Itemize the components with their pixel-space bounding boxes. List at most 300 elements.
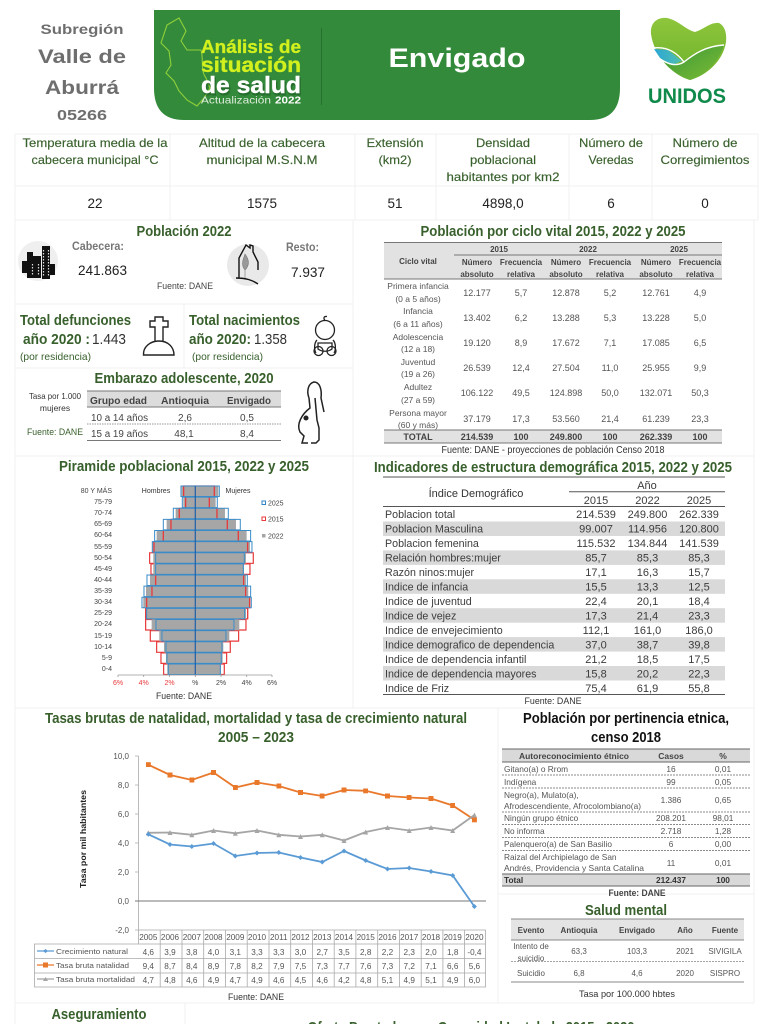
table: étnico: Negro(a), Mulato(a), xyxy=(504,790,579,800)
table: chart data: 2007 xyxy=(183,933,201,942)
table: chart data: 2010 xyxy=(248,933,267,942)
chart: line chart of rates: 0,0 xyxy=(118,897,130,906)
panel: subregion: 05266 xyxy=(57,107,107,124)
chart: line chart of rates: -2,0 xyxy=(115,926,130,935)
panel: embarazo adolescente: Fuente: DANE xyxy=(27,427,83,437)
table: salud mental: 63,3 xyxy=(571,947,587,956)
heading: aseguramiento: Aseguramiento xyxy=(52,1006,146,1023)
table: embarazo: 15 a 19 años xyxy=(91,429,148,440)
chart: line chart of rates: 6,0 xyxy=(118,810,130,819)
title: análisis de situación de salud: de salud xyxy=(202,74,302,100)
table: índice demográfico: 22,4 xyxy=(585,596,607,608)
chart: population pyramid: 45-49 xyxy=(94,566,112,573)
table: ciclo vital: 49,5 xyxy=(512,388,530,398)
table: salud mental xyxy=(511,919,744,982)
table: general data: 0 xyxy=(701,196,709,211)
table: embarazo: 8,4 xyxy=(240,429,254,440)
table: ciclo vital: Ciclo vital xyxy=(399,257,437,266)
table: ciclo vital: (12 a 18) xyxy=(401,344,435,354)
table: general data: cabecera municipal °C xyxy=(32,153,159,167)
chart: line chart of rates: Tasa por mil habitantes xyxy=(78,790,88,888)
icon: baby xyxy=(314,316,336,356)
table: ciclo vital: 100 xyxy=(692,432,708,442)
table: chart data: 3,3 xyxy=(251,948,263,957)
table: étnico: 0,01 xyxy=(715,764,731,774)
table: embarazo: Envigado xyxy=(227,395,271,407)
table: chart data: 3,8 xyxy=(186,948,198,957)
table: general data: Temperatura media de la xyxy=(22,136,168,150)
table: étnico: Casos xyxy=(658,751,684,761)
table: chart data: 1,8 xyxy=(447,948,459,957)
table: índice demográfico: 214.539 xyxy=(576,509,616,521)
table: chart data: 2,3 xyxy=(404,948,415,957)
table: embarazo xyxy=(87,391,281,440)
table: índice demográfico: 85,7 xyxy=(585,552,607,564)
panel: salud mental: Salud mental xyxy=(585,902,667,919)
table: ciclo vital: relativa xyxy=(596,270,625,279)
table: chart data: 3,5 xyxy=(338,948,350,957)
table: índice demográfico: 2022 xyxy=(635,495,660,507)
table: índice demográfico: 38,7 xyxy=(637,640,658,652)
chart: population pyramid: 0-4 xyxy=(102,666,112,673)
table: salud mental: 2020 xyxy=(676,969,694,978)
table: índice demográfico: 39,8 xyxy=(688,640,710,652)
table: chart data: 9,4 xyxy=(143,962,154,971)
table: étnico: 2.718 xyxy=(661,826,682,836)
table: índice demográfico: 115.532 xyxy=(577,538,615,550)
table: chart data: 4,0 xyxy=(208,948,220,957)
panel: total nacimientos xyxy=(189,312,336,363)
chart: population pyramid: 65-69 xyxy=(94,521,112,528)
table: étnico: 1.386 xyxy=(661,795,682,805)
table: chart data: 4,9 xyxy=(404,976,415,985)
title: análisis de situación de salud: Actualización xyxy=(201,94,271,106)
table: general data: 4898,0 xyxy=(482,196,524,211)
table: índice demográfico: 15,7 xyxy=(688,567,710,579)
title: análisis de situación de salud: 2022 xyxy=(275,94,301,106)
icon: city xyxy=(18,241,58,281)
table: índice demográfico: Indice de dependencia infantil xyxy=(385,654,526,666)
table: general data: Densidad xyxy=(476,136,530,150)
table: ciclo vital: 26.539 xyxy=(463,363,491,373)
table: general data: 51 xyxy=(387,196,403,211)
chart: population pyramid: 2% xyxy=(164,680,175,687)
table: índice demográfico: 262.339 xyxy=(679,509,719,521)
table: étnico: Andrés, Providencia y Santa Catalina xyxy=(504,863,644,873)
chart: population pyramid: 15-19 xyxy=(94,633,112,640)
chart: population pyramid: 6% xyxy=(267,680,277,687)
table: general data: poblacional xyxy=(470,153,536,167)
table: ciclo vital: absoluto xyxy=(460,270,494,279)
table: chart data: 7,7 xyxy=(338,962,350,971)
table: índice demográfico: 21,2 xyxy=(585,654,607,666)
table: chart data: 5,1 xyxy=(382,976,394,985)
table: general data xyxy=(15,134,758,220)
panel: pertenencia étnica: Fuente: DANE xyxy=(608,888,666,898)
panel: subregion: Subregión xyxy=(40,22,123,37)
table: índice demográfico: 16,3 xyxy=(637,567,658,579)
table: índice demográfico: 99.007 xyxy=(579,524,613,536)
line: crecimiento natural xyxy=(148,834,474,906)
table: índice demográfico: Indice de Friz xyxy=(385,683,449,695)
table: chart data: 2015 xyxy=(357,933,375,942)
panel: total nacimientos: Total nacimientos xyxy=(189,312,300,329)
table: índice demográfico: 17,5 xyxy=(688,654,710,666)
chart: population pyramid: 30-34 xyxy=(94,599,112,606)
table: ciclo vital: 12.878 xyxy=(552,288,580,298)
table: chart data: 7,9 xyxy=(273,962,285,971)
chart: population pyramid: 5-9 xyxy=(102,655,112,662)
table: chart data: 7,8 xyxy=(230,962,241,971)
panel: tasas brutas xyxy=(34,710,486,1002)
panel: subregion xyxy=(38,22,126,124)
panel: población 2022: Población 2022 xyxy=(136,223,232,240)
table: ciclo vital: 17.085 xyxy=(642,338,670,348)
table: ciclo vital: 9,9 xyxy=(694,363,706,373)
table: índice demográfico: 23,3 xyxy=(688,610,710,622)
table: embarazo: 2,6 xyxy=(178,413,192,424)
table: chart data: 2,0 xyxy=(425,948,437,957)
icon: rural house xyxy=(227,244,269,286)
table: índice demográfico: 161,0 xyxy=(634,625,661,637)
table: chart data: 4,6 xyxy=(273,976,285,985)
table: embarazo: Grupo edad xyxy=(90,395,147,407)
table: salud mental: Año xyxy=(677,926,693,935)
legend: pyramid: 2025 xyxy=(268,500,284,508)
section frame lines xyxy=(15,220,754,1024)
table: étnico: 98,01 xyxy=(713,813,734,823)
table: salud mental: Antioquia xyxy=(561,926,598,935)
chart: line chart of rates: 2,0 xyxy=(118,868,130,877)
table: chart data: 4,2 xyxy=(338,976,350,985)
table: general data: Corregimientos xyxy=(660,153,750,167)
panel: embarazo adolescente: Tasa por 1.000 xyxy=(29,391,81,401)
table: ciclo vital xyxy=(384,242,722,443)
table: ciclo vital: 21,4 xyxy=(601,414,619,424)
table: chart data: 4,5 xyxy=(295,976,307,985)
chart: line chart of rates: 4,0 xyxy=(118,839,130,848)
panel: total nacimientos: 1.358 xyxy=(254,331,287,348)
table: ciclo vital: (0 a 5 años) xyxy=(395,294,441,304)
table: ciclo vital: Frecuencia xyxy=(679,258,722,267)
panel: población 2022: Cabecera: xyxy=(72,241,124,253)
table: ciclo vital: 23,3 xyxy=(691,414,709,424)
table: chart data: 4,9 xyxy=(251,976,263,985)
panel: tasas brutas: Fuente: DANE xyxy=(228,992,284,1002)
table: índice demográfico: 15,5 xyxy=(585,582,607,594)
legend: pyramid xyxy=(262,500,284,540)
legend: pyramid: 2015 xyxy=(268,516,284,524)
table: índice demográfico: 13,3 xyxy=(637,582,658,594)
table: ciclo vital: absoluto xyxy=(549,270,583,279)
table: ciclo vital: 37.179 xyxy=(463,414,491,424)
table: índice demográfico xyxy=(383,477,725,695)
table: índice demográfico: 75,4 xyxy=(585,683,607,695)
table: chart data: 8,2 xyxy=(251,962,263,971)
table: étnico: 0,00 xyxy=(715,839,731,849)
table: ciclo vital: 27.504 xyxy=(552,363,580,373)
chart: population pyramid: Hombres xyxy=(142,488,171,495)
panel: total defunciones: (por residencia) xyxy=(20,351,91,363)
table: chart data: 2,7 xyxy=(317,948,328,957)
table: étnico: Ningún grupo étnico xyxy=(504,813,579,823)
table: ciclo vital: 8,9 xyxy=(515,338,527,348)
table: ciclo vital: 5,7 xyxy=(515,288,527,298)
table: salud mental: 2021 xyxy=(676,947,694,956)
table: índice demográfico: Indice de infancia xyxy=(385,582,468,594)
panel: pirámide poblacional: Fuente: DANE xyxy=(156,691,212,702)
title: Envigado: Envigado xyxy=(388,43,526,73)
panel: total defunciones: Total defunciones xyxy=(20,312,131,329)
table: ciclo vital: 11,0 xyxy=(602,363,618,373)
table: índice demográfico: 141.539 xyxy=(679,538,719,550)
table: índice demográfico: Año xyxy=(637,480,657,492)
panel: indicadores demográficos xyxy=(374,459,732,706)
table: étnico: 0,01 xyxy=(715,858,731,868)
table: índice demográfico: 15,8 xyxy=(585,668,607,680)
table: ciclo vital: 214.539 xyxy=(461,432,493,442)
title: análisis de situación de salud: de salud xyxy=(201,72,301,98)
table: ciclo vital: Número xyxy=(551,258,581,267)
table: índice demográfico: Indice demografico de dependencia xyxy=(385,640,554,652)
table: chart data: 4,7 xyxy=(230,976,241,985)
chart: population pyramid: 35-39 xyxy=(94,588,112,595)
legend: series xyxy=(37,947,135,984)
panel: tasas brutas: 2005 – 2023 xyxy=(218,729,294,746)
chart: population pyramid: 20-24 xyxy=(94,621,112,628)
table: ciclo vital: 100 xyxy=(513,432,529,442)
table: ciclo vital: 100 xyxy=(602,432,618,442)
table: chart data: 4,6 xyxy=(317,976,328,985)
table: ciclo vital: Juventud xyxy=(401,357,436,367)
table: chart data: 2,2 xyxy=(382,948,394,957)
table: chart data: 4,9 xyxy=(208,976,220,985)
table: ciclo vital: 61.239 xyxy=(642,414,670,424)
table: embarazo: Antioquia xyxy=(161,395,209,407)
panel: población por ciclo vital: Fuente: DANE - proyecciones de población Censo 2018 xyxy=(442,445,665,456)
chart: population pyramid: 40-44 xyxy=(94,577,112,584)
table: ciclo vital: TOTAL xyxy=(403,432,433,442)
table: étnico: Indígena xyxy=(504,777,537,787)
table: chart data: 7,3 xyxy=(317,962,328,971)
table: índice demográfico: 17,3 xyxy=(585,610,607,622)
table: ciclo vital: (6 a 11 años) xyxy=(393,319,443,329)
table: étnico: 100 xyxy=(716,875,730,885)
table: ciclo vital: 12.761 xyxy=(642,288,670,298)
table: salud mental: suicidio xyxy=(518,954,545,963)
table: ciclo vital: 132.071 xyxy=(640,388,672,398)
table: chart data: 4,6 xyxy=(143,948,154,957)
table: índice demográfico: 112,1 xyxy=(583,625,609,637)
table: índice demográfico: 134.844 xyxy=(628,538,667,550)
chart: population pyramid xyxy=(81,486,284,687)
table: chart data: 2012 xyxy=(291,933,310,942)
table: salud mental: Fuente xyxy=(712,926,739,935)
table: chart data: 6,0 xyxy=(469,976,481,985)
table: embarazo: 0,5 xyxy=(240,413,254,424)
table: chart data: 2013 xyxy=(313,933,332,942)
table: ciclo vital: 2025 xyxy=(670,245,688,254)
table: étnico: 0,65 xyxy=(715,795,731,805)
table: índice demográfico: Indice de envejecimiento xyxy=(385,625,503,637)
panel: total nacimientos: (por residencia) xyxy=(192,351,263,363)
table: étnico: 6 xyxy=(669,839,674,849)
table: chart data: 2006 xyxy=(161,933,180,942)
table: chart data: 2008 xyxy=(204,933,223,942)
chart: line chart of rates xyxy=(78,752,486,935)
table: salud mental: Evento xyxy=(518,926,544,935)
title: análisis de situación de salud xyxy=(201,36,302,106)
panel: indicadores demográficos: Fuente: DANE xyxy=(524,696,582,706)
table: ciclo vital: relativa xyxy=(686,270,715,279)
table: chart data: 7,1 xyxy=(425,962,437,971)
table: chart data: 4,6 xyxy=(186,976,198,985)
title: análisis de situación de salud: situación xyxy=(201,54,301,77)
table: salud mental: SISPRO xyxy=(710,969,740,978)
table: chart data: 2019 xyxy=(444,933,462,942)
table: salud mental: Intento de xyxy=(513,942,549,951)
table: étnico: 99 xyxy=(666,777,676,787)
table: salud mental: 103,3 xyxy=(627,947,648,956)
table: étnico: Gitano(a) o Rrom xyxy=(504,764,568,774)
panel: total defunciones: año 2020 : xyxy=(23,331,90,348)
table: chart data: 2017 xyxy=(400,933,419,942)
table: chart data: 4,8 xyxy=(360,976,372,985)
legend: series: Tasa bruta natalidad xyxy=(56,961,129,970)
panel: población por ciclo vital: Población por ciclo vital 2015, 2022 y 2025 xyxy=(420,223,686,240)
panel: población 2022: Fuente: DANE xyxy=(157,281,213,291)
table: general data: 1575 xyxy=(247,196,277,211)
table: ciclo vital: 19.120 xyxy=(463,338,491,348)
table: índice demográfico: Indice de dependencia mayores xyxy=(385,668,537,680)
table: índice demográfico: Poblacion Masculina xyxy=(385,524,483,536)
panel: población por ciclo vital xyxy=(384,223,722,456)
table: índice demográfico: Índice Demográfico xyxy=(429,487,523,500)
table: ciclo vital: Frecuencia xyxy=(589,258,632,267)
table: índice demográfico: 2025 xyxy=(687,495,711,507)
table: chart data: 4,7 xyxy=(143,976,154,985)
table: general data: municipal M.S.N.M xyxy=(206,153,318,167)
table: índice demográfico: 17,1 xyxy=(585,567,607,579)
table: chart data: 7,6 xyxy=(360,962,372,971)
chart: line chart of rates: 10,0 xyxy=(113,752,130,761)
table: ciclo vital: 2015 xyxy=(490,245,508,254)
logo: Unidos: UNIDOS xyxy=(648,85,726,108)
table: salud mental: SIVIGILA xyxy=(708,947,742,956)
table: ciclo vital: 12,4 xyxy=(512,363,530,373)
table: étnico: Afrodescendiente, Afrocolombiano(a) xyxy=(504,801,641,811)
panel: pirámide poblacional xyxy=(59,458,309,702)
table: étnico xyxy=(502,749,750,886)
table: étnico: Palenquero(a) de San Basilio xyxy=(504,839,612,849)
panel: población 2022: 241.863 xyxy=(78,262,127,278)
table: índice demográfico: 18,5 xyxy=(637,654,658,666)
panel: indicadores demográficos: Indicadores de estructura demográfica 2015, 2022 y 2025 xyxy=(374,459,732,476)
table: general data: Número de xyxy=(672,136,738,150)
table: ciclo vital: Frecuencia xyxy=(500,258,543,267)
table: chart data: 7,3 xyxy=(382,962,394,971)
chart: population pyramid: % xyxy=(192,680,198,687)
table: chart data: 2011 xyxy=(270,933,288,942)
panel: salud mental xyxy=(511,902,744,1000)
table: índice demográfico: 120.800 xyxy=(679,524,719,536)
table: ciclo vital: 124.898 xyxy=(550,388,582,398)
table: ciclo vital: Adultez xyxy=(404,382,432,392)
table: étnico: 16 xyxy=(666,764,676,774)
legend: series: Crecimiento natural xyxy=(56,947,128,956)
panel: población 2022 xyxy=(18,223,325,291)
table: índice demográfico: 249.800 xyxy=(628,509,667,521)
table: chart data: 2005 xyxy=(139,933,158,942)
table: índice demográfico: 114.956 xyxy=(628,524,667,536)
table: embarazo: 10 a 14 años xyxy=(91,413,148,424)
chart: population pyramid: 60-64 xyxy=(94,532,112,539)
table: general data: Veredas xyxy=(588,153,634,167)
table: ciclo vital: (27 a 59) xyxy=(401,395,435,405)
table: ciclo vital: 12.177 xyxy=(463,288,491,298)
chart: population pyramid: 50-54 xyxy=(94,555,112,562)
legend: series: Tasa bruta mortalidad xyxy=(56,975,135,984)
icon: grave cross xyxy=(143,317,174,355)
panel: pirámide poblacional: Piramide poblacional 2015, 2022 y 2025 xyxy=(59,458,309,475)
panel: embarazo adolescente xyxy=(27,370,324,443)
table: índice demográfico: 85,3 xyxy=(688,552,710,564)
red 2015 ticks xyxy=(146,486,250,619)
table: índice demográfico: 55,8 xyxy=(688,683,710,695)
table: general data: 6 xyxy=(607,196,615,211)
icon: pregnant woman xyxy=(299,382,324,443)
table: chart data: 2020 xyxy=(465,933,484,942)
banner: header xyxy=(154,10,620,120)
legend: pyramid: 2022 xyxy=(268,534,284,540)
chart: population pyramid: 75-79 xyxy=(94,499,112,506)
table: chart data: 4,8 xyxy=(164,976,176,985)
title: análisis de situación de salud: Análisis de xyxy=(201,36,301,57)
panel: embarazo adolescente: Embarazo adolescente, 2020 xyxy=(94,370,274,387)
table: general data: habitantes por km2 xyxy=(446,170,560,184)
chart: line chart of rates: 8,0 xyxy=(118,781,130,790)
table: índice demográfico: Poblacion total xyxy=(385,509,455,521)
table: chart data xyxy=(34,930,486,987)
table: ciclo vital: 50,0 xyxy=(601,388,619,398)
table: ciclo vital: 13.402 xyxy=(463,313,491,323)
table: étnico: 212.437 xyxy=(656,875,686,885)
table: ciclo vital: 17,3 xyxy=(512,414,530,424)
table: chart data: 2,8 xyxy=(360,948,372,957)
table: ciclo vital: absoluto xyxy=(639,270,673,279)
table: índice demográfico: Razón ninos:mujer xyxy=(385,567,475,579)
chart: population pyramid: 6% xyxy=(113,680,123,687)
table: ciclo vital: 5,3 xyxy=(604,313,616,323)
table: étnico: 1,28 xyxy=(715,826,731,836)
table: índice demográfico: 18,4 xyxy=(688,596,710,608)
table: chart data: 4,9 xyxy=(447,976,459,985)
table: ciclo vital: Persona mayor xyxy=(389,408,447,418)
table: ciclo vital: 5,0 xyxy=(694,313,706,323)
table: chart data: 7,2 xyxy=(404,962,415,971)
table: ciclo vital: 5,2 xyxy=(604,288,616,298)
table: ciclo vital: 106.122 xyxy=(461,388,493,398)
table: ciclo vital: 50,3 xyxy=(691,388,709,398)
table: índice demográfico: 20,1 xyxy=(637,596,658,608)
panel: pertenencia étnica: Población por pertinencia etnica, xyxy=(523,710,729,727)
table: embarazo: 48,1 xyxy=(174,429,194,440)
table: salud mental: 6,8 xyxy=(573,969,585,978)
table: general data: Altitud de la cabecera xyxy=(199,136,325,150)
panel: subregion: Aburrá xyxy=(45,78,120,99)
table: ciclo vital: 4,9 xyxy=(694,288,706,298)
table: índice demográfico: 22,3 xyxy=(688,668,710,680)
